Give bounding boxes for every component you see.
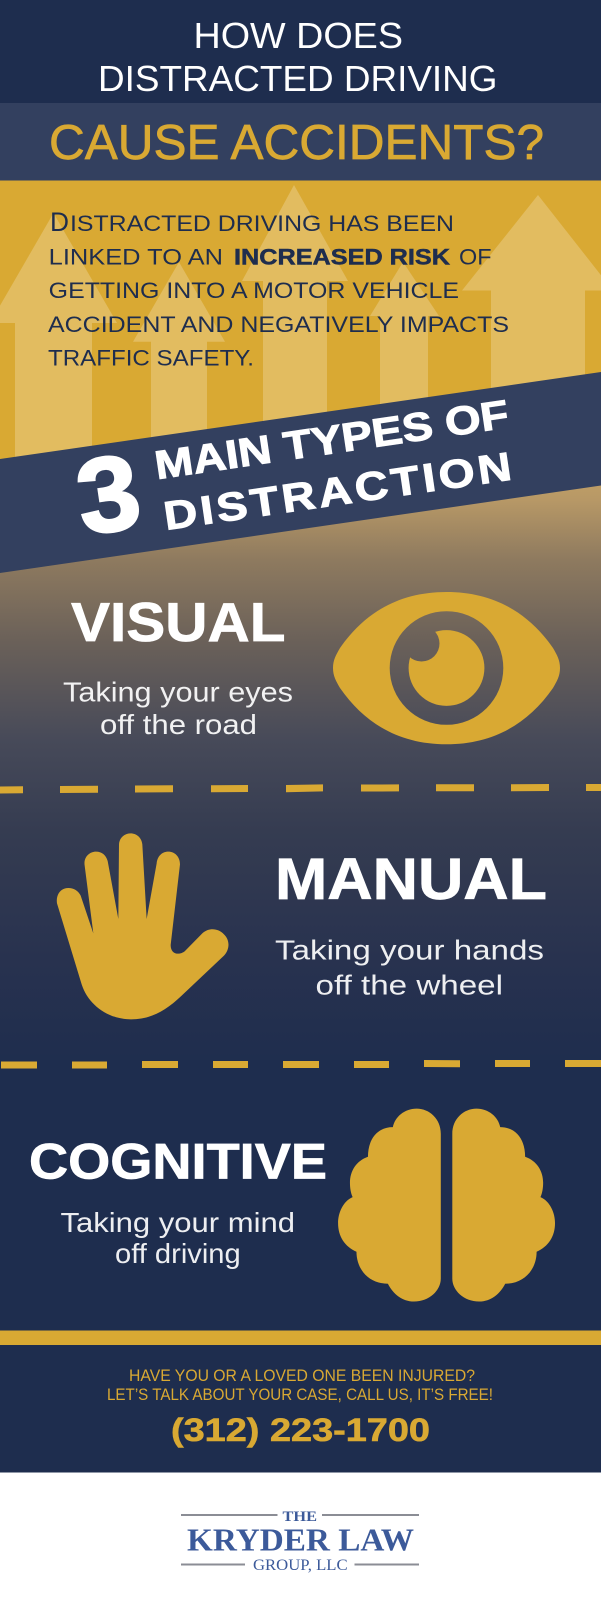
panel: gradient background for visual and manual sections xyxy=(0,460,601,1340)
icon: eye xyxy=(333,592,560,744)
title line 2: DISTRACTED DRIVING xyxy=(98,58,497,99)
divider: gold strip xyxy=(0,1330,601,1345)
panel: diagonal banner xyxy=(0,372,601,573)
intro paragraph: TRAFFIC SAFETY. xyxy=(48,346,254,370)
text: manual description: Taking your hands xyxy=(275,934,544,965)
intro paragraph: D xyxy=(50,207,69,237)
panel: subtitle band xyxy=(0,103,601,180)
section: visual xyxy=(63,591,560,744)
text: cognitive description xyxy=(60,1207,295,1269)
section: manual xyxy=(57,833,547,1019)
heading: manual: MANUAL xyxy=(275,847,547,912)
intro paragraph: ISTRACTED DRIVING HAS BEEN xyxy=(70,211,454,236)
banner number: 3 xyxy=(69,432,148,558)
title line 1: HOW DOES xyxy=(194,15,403,56)
text: visual description: off the road xyxy=(100,709,257,740)
road dashes: upper xyxy=(0,784,601,794)
intro paragraph: ACCIDENT AND NEGATIVELY IMPACTS xyxy=(48,312,509,337)
icon: brain xyxy=(338,1109,555,1302)
text: call to action line 2: LET’S TALK ABOUT YOUR CASE, CALL US, IT’S FREE! xyxy=(107,1386,493,1404)
logo: THE xyxy=(282,1509,317,1525)
intro paragraph: INCREASED RISK xyxy=(234,244,450,270)
text: cognitive description: Taking your mind xyxy=(60,1207,295,1238)
text: manual description xyxy=(275,934,544,1000)
phone number: (312) 223-1700 xyxy=(171,1412,430,1448)
panel: header xyxy=(0,0,601,103)
section: cognitive xyxy=(29,1109,555,1302)
heading: cognitive: COGNITIVE xyxy=(29,1134,327,1190)
intro paragraph: OF xyxy=(459,244,492,270)
background arrows xyxy=(0,185,601,480)
heading: visual: VISUAL xyxy=(71,591,286,653)
road dashes: lower xyxy=(1,1060,601,1068)
icon: hand xyxy=(57,833,228,1019)
text: visual description xyxy=(63,677,293,740)
logo: GROUP, LLC xyxy=(253,1557,348,1574)
banner line 2: DISTRACTION xyxy=(161,444,518,539)
panel: intro with arrows xyxy=(0,180,601,480)
text: manual description: off the wheel xyxy=(316,969,503,1000)
panel: cognitive background xyxy=(0,1060,601,1331)
text: cognitive description: off driving xyxy=(115,1238,241,1269)
panel: call to action xyxy=(0,1345,601,1472)
logo xyxy=(181,1509,419,1574)
intro paragraph xyxy=(48,207,509,370)
subtitle: CAUSE ACCIDENTS? xyxy=(49,116,544,170)
text: call to action line 1: HAVE YOU OR A LOVED ONE BEEN INJURED? xyxy=(129,1367,475,1385)
intro paragraph: GETTING INTO A MOTOR VEHICLE xyxy=(49,278,459,303)
text: visual description: Taking your eyes xyxy=(63,677,293,708)
intro paragraph: LINKED TO AN xyxy=(49,244,223,270)
logo: KRYDER LAW xyxy=(187,1522,414,1558)
banner line 1: MAIN TYPES OF xyxy=(152,393,511,488)
